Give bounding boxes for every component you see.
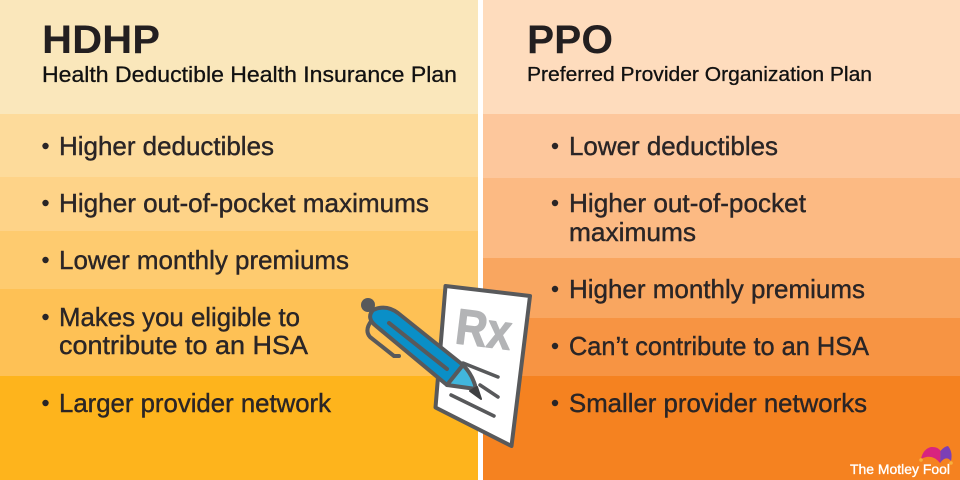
pen body xyxy=(370,308,463,385)
pen tip xyxy=(447,365,476,389)
PPO bullet list xyxy=(552,131,870,418)
PPO bullet list: Smaller provider networks xyxy=(569,388,867,418)
HDHP subtitle: Health Deductible Health Insurance Plan xyxy=(42,62,457,87)
HDHP bullet list: Makes you eligible to xyxy=(59,302,300,332)
PPO row bands xyxy=(483,114,960,480)
pen cap xyxy=(361,298,375,312)
HDHP bullet list: Larger provider network xyxy=(59,388,332,418)
paper lines xyxy=(451,363,498,416)
PPO bullet list: maximums xyxy=(569,217,696,247)
logo: The Motley Fool xyxy=(850,446,953,477)
PPO heading: PPO xyxy=(527,18,613,62)
pen highlight xyxy=(389,323,447,369)
HDHP bullet list xyxy=(42,131,429,418)
logo jester hat xyxy=(919,446,953,465)
PPO bullet list: Can’t contribute to an HSA xyxy=(569,331,870,361)
HDHP bullet list: contribute to an HSA xyxy=(59,330,309,360)
pen clip xyxy=(367,320,399,356)
HDHP header band xyxy=(0,0,478,114)
pen nib xyxy=(470,387,481,399)
icon: prescription and pen xyxy=(361,286,530,446)
icon: prescription paper xyxy=(436,286,530,446)
HDHP heading: HDHP xyxy=(42,18,160,62)
PPO bullet list: Lower deductibles xyxy=(569,131,778,161)
Rx label: Rx xyxy=(453,298,515,361)
HDHP row bands xyxy=(0,114,478,480)
panel: HDHP xyxy=(0,0,478,480)
PPO subtitle: Preferred Provider Organization Plan xyxy=(527,63,872,86)
panel: PPO xyxy=(483,0,960,480)
PPO header band xyxy=(483,0,960,114)
PPO bullet list: Higher monthly premiums xyxy=(569,274,865,304)
HDHP bullet list: Higher deductibles xyxy=(59,131,274,161)
icon: pen xyxy=(361,298,481,399)
HDHP bullet list: Higher out-of-pocket maximums xyxy=(59,188,429,218)
PPO bullet list: Higher out-of-pocket xyxy=(569,188,807,218)
HDHP bullet list: Lower monthly premiums xyxy=(59,245,349,275)
logo wordmark: The Motley Fool xyxy=(850,461,950,477)
